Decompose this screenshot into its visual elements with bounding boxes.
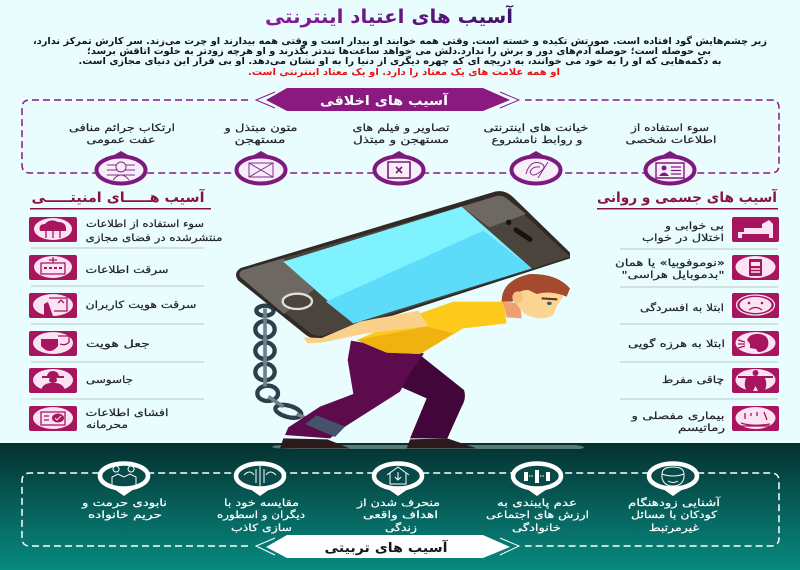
row: misuse of published data xyxy=(29,217,222,244)
row: insomnia: اختلال در خواب xyxy=(642,233,724,244)
intro paragraph xyxy=(33,35,767,78)
heading: security harms: آسیب هـــــای امنیتـــــی xyxy=(32,188,206,206)
item: personal data misuse xyxy=(626,123,716,184)
item: disregard of family social values xyxy=(486,464,589,534)
illustration: man carrying giant phone xyxy=(236,191,570,448)
item: internet infidelity xyxy=(484,123,588,184)
item: early exposure of children: غیرمرتبط xyxy=(649,523,699,534)
item: early exposure of children: آشنایی زودهنگام xyxy=(628,496,722,509)
item: early exposure of children: کودکان با مسائل xyxy=(631,510,717,521)
panel: educational harms xyxy=(22,464,779,558)
intro paragraph: او همه علامت های یک معتاد را دارد. او یک معتاد اینترنتی است. xyxy=(248,67,560,78)
row: insomnia xyxy=(642,217,779,244)
item: public indecency crimes: ارتکاب جرائم منافی xyxy=(69,123,175,134)
item: deviation from real life goals xyxy=(356,464,440,534)
banner: moral harms: آسیب های اخلاقی xyxy=(320,92,449,109)
row: misuse of published data: منتشرشده در فضای مجازی xyxy=(86,233,222,244)
item: internet infidelity: خیانت های اینترنتی xyxy=(484,123,588,134)
item: public indecency crimes: عفت عمومی xyxy=(86,135,156,146)
panel: security harms xyxy=(29,188,222,431)
item: comparing oneself and false idols: مقایسه خود با xyxy=(224,498,299,509)
item: personal data misuse: اطلاعات شخصی xyxy=(626,135,716,146)
item: deviation from real life goals: منحرف شدن از xyxy=(356,498,440,509)
row: obesity: چاقی مفرط xyxy=(662,375,724,386)
item: comparing oneself and false idols: دیگران و اسطوره xyxy=(217,509,305,521)
row: joint disease and rheumatism: بیماری مفصلی و xyxy=(630,411,724,422)
item: early exposure of children xyxy=(628,464,722,534)
panel: physical and mental harms xyxy=(597,188,779,434)
banner: moral harms xyxy=(256,88,519,111)
item: obscene images and films: تصاویر و فیلم های xyxy=(352,123,450,134)
chain xyxy=(255,306,310,420)
row: user identity theft xyxy=(29,293,196,318)
man xyxy=(280,274,570,448)
item: obscene texts: مستهجن xyxy=(234,135,286,146)
row: joint disease and rheumatism xyxy=(630,406,779,434)
item: disregard of family social values: ارزش های اجتماعی xyxy=(486,510,589,521)
row: identity forgery: جعل هویت xyxy=(86,339,150,350)
item: internet infidelity: و روابط نامشروع xyxy=(492,135,583,146)
item: obscene texts: متون مبتذل و xyxy=(223,123,298,134)
item: loss of family privacy: حریم خانواده xyxy=(88,510,162,521)
row: data theft: سرقت اطلاعات xyxy=(86,265,168,276)
row: disclosure of confidential data xyxy=(29,406,168,431)
title: آسیب های اعتیاد اینترنتی xyxy=(265,4,513,28)
row: disclosure of confidential data: محرمانه xyxy=(86,420,128,431)
row: foul language: ابتلا به هرزه گویی xyxy=(628,338,725,350)
panel: moral harms xyxy=(22,88,779,184)
row: nomophobia: "بدموبایل هراسی" xyxy=(622,270,724,281)
banner: educational harms xyxy=(256,535,519,558)
row: data theft xyxy=(29,255,168,280)
item: comparing oneself and false idols: سازی کاذب xyxy=(231,523,292,534)
item: obscene images and films: مستهجن و مبتذل xyxy=(353,135,449,146)
row: obesity xyxy=(662,368,779,393)
row: depression xyxy=(640,293,779,318)
item: disregard of family social values: خانوادگی xyxy=(512,522,561,534)
panel: educational harms background xyxy=(0,443,800,570)
row: joint disease and rheumatism: رماتیسم xyxy=(678,423,725,434)
heading: physical and mental harms: آسیب های جسمی و روانی xyxy=(597,188,778,206)
item: deviation from real life goals: اهداف واقعی xyxy=(363,510,438,521)
row: insomnia: بی خوابی و xyxy=(664,221,724,232)
row: espionage: جاسوسی xyxy=(86,375,133,386)
ground shadow xyxy=(272,445,584,449)
item: comparing oneself and false idols xyxy=(217,464,305,534)
intro paragraph: بی حوصله است؛ حوصله آدم‌های دور و برش را ندارد.دلش می خواهد ساعت‌ها تندتر بگذرند و او هرچه زودتر به خلوت اتاقش برسد؛ xyxy=(87,44,711,57)
item: obscene texts xyxy=(223,123,298,184)
banner: educational harms: آسیب های تربیتی xyxy=(324,539,448,556)
row: user identity theft: سرقت هویت کاربران xyxy=(86,300,196,311)
row: disclosure of confidential data: افشای اطلاعات xyxy=(86,408,168,419)
item: personal data misuse: سوء استفاده از xyxy=(630,123,709,134)
row: foul language xyxy=(628,331,779,356)
intro paragraph: به دکمه‌هایی که او را به خود می خوانند، به دریچه ای که چهره دیگری از دنیا را به او نشان می‌دهد. او بی قرار این دنیای مجازی است. xyxy=(78,55,722,67)
row: espionage xyxy=(29,368,133,393)
row: misuse of published data: سوء استفاده از اطلاعات xyxy=(86,219,204,230)
item: loss of family privacy xyxy=(81,464,167,521)
item: disregard of family social values: عدم پایبندی به xyxy=(497,498,577,509)
row: nomophobia xyxy=(615,255,779,281)
intro paragraph: زیر چشم‌هایش گود افتاده است. صورتش تکیده و خسته است. وقتی همه خوابند او بیدار است و وقتی همه بیدارند او چرت می‌زند. سر کارش تمرکز ندارد، xyxy=(33,35,767,47)
phone xyxy=(236,191,570,339)
row: depression: ابتلا به افسردگی xyxy=(640,302,724,314)
item: public indecency crimes xyxy=(69,123,175,184)
item: obscene images and films xyxy=(352,123,450,184)
item: loss of family privacy: نابودی حرمت و xyxy=(81,498,167,509)
item: deviation from real life goals: زندگی xyxy=(385,522,417,534)
row: nomophobia: «نوموفوبیا» یا همان xyxy=(615,258,725,269)
row: identity forgery xyxy=(29,331,150,356)
